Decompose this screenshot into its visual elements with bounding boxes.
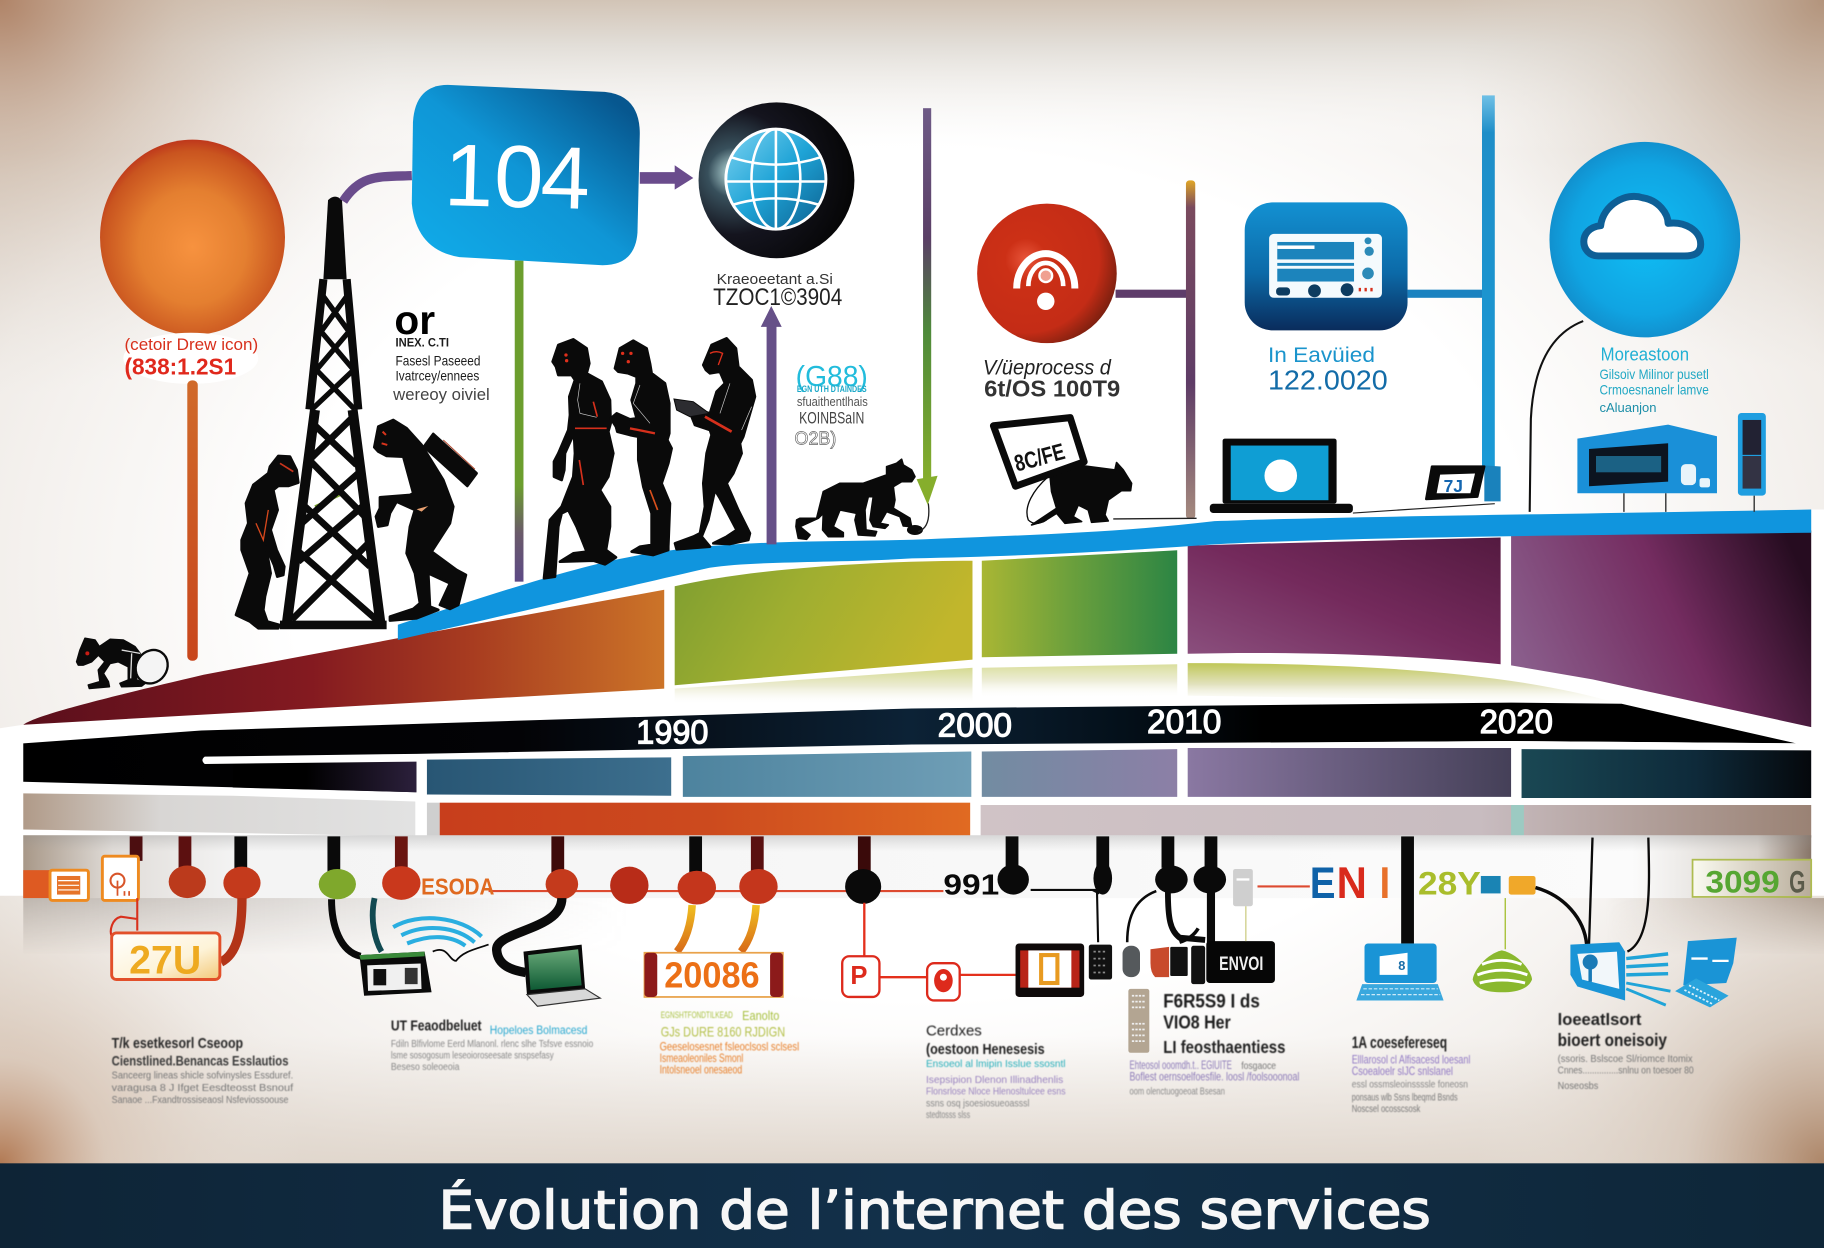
pale green strips xyxy=(675,663,1623,705)
purple connector from wifi xyxy=(1116,290,1188,298)
grey pendant xyxy=(1233,869,1253,941)
box 20086 xyxy=(644,953,783,997)
blue rays xyxy=(1626,954,1670,1005)
purple up arrow xyxy=(761,306,782,544)
blue app window box xyxy=(1245,202,1408,330)
year label 2020: 2020 xyxy=(1480,703,1553,741)
text block column four: Isepsipion Dlenon Illinadhenlis xyxy=(926,1075,1063,1086)
tubes to 27U box xyxy=(111,898,242,962)
icon: orange document xyxy=(50,870,88,900)
text block column five: Boflest oernsoelfoesfile. loosl /foolsooonoal xyxy=(1130,1071,1299,1084)
blue laptop icon xyxy=(1356,943,1444,1000)
text block column three: EGNSHTFONDTILKEAD xyxy=(661,1010,733,1020)
tablet with icons xyxy=(359,952,432,996)
black cables right xyxy=(1505,838,1649,952)
wifi red circle xyxy=(977,204,1117,343)
text: blue caption: 122.0020 xyxy=(1268,365,1388,396)
text: cyan note: (G88) xyxy=(796,361,868,393)
upright figures xyxy=(544,338,755,578)
globe icon xyxy=(699,102,854,258)
purple to green arrow xyxy=(917,108,938,505)
text block column four: Ensoeol al lmipin Isslue ssosntl xyxy=(926,1059,1066,1070)
timeline nodes xyxy=(169,862,1226,904)
year label 2000: 2000 xyxy=(938,706,1012,744)
curved purple connector xyxy=(343,176,412,201)
text block column six: 1A coesefereseq xyxy=(1352,1034,1447,1052)
figure two xyxy=(611,341,672,555)
ape figure small xyxy=(236,456,298,628)
block: green xyxy=(982,550,1177,657)
S curved black cable xyxy=(497,898,562,973)
text: Or note: Ivatrcey/ennees xyxy=(396,367,479,383)
gold purple vertical line xyxy=(1186,180,1195,519)
text: Or note: or xyxy=(394,297,435,343)
green plaque 3099: G xyxy=(1789,864,1805,899)
text: sphere caption: (cetoir Drew icon) xyxy=(124,336,258,354)
text block column seven xyxy=(1558,1011,1694,1092)
text block column seven: loeeatlsort xyxy=(1558,1011,1642,1029)
label EN I: E xyxy=(1310,859,1335,908)
text: Or note: wereoy oiviel xyxy=(392,386,490,404)
text block column three: Intolsneoel onesaeod xyxy=(660,1064,742,1077)
white backing behind ribbons xyxy=(0,510,1824,896)
small tablet device xyxy=(1426,465,1501,501)
icon: red round box xyxy=(927,963,960,1000)
text: Or note: Fasesl Paseeed xyxy=(396,352,480,368)
text block column two xyxy=(391,1018,593,1073)
green dome icon xyxy=(1473,950,1532,992)
blue vertical line xyxy=(1482,95,1495,469)
bottom title band xyxy=(0,1163,1824,1248)
text block column three: Ismeaoleoniles Smonl xyxy=(660,1052,743,1065)
text block column three: GJs DURE 8160 RJDIGN xyxy=(661,1024,785,1040)
small tablet device: 7J xyxy=(1444,476,1463,496)
block: purple xyxy=(1188,537,1501,664)
text block column one: T/k esetkesorl Cseoop xyxy=(112,1035,243,1052)
red tablet xyxy=(1016,943,1084,997)
text block column four: ssns osq jsoesiosueoasssl xyxy=(926,1098,1029,1109)
blue box with 104 xyxy=(412,85,640,265)
black box ENVOI xyxy=(1206,941,1275,983)
icon: red P box xyxy=(842,956,879,997)
label EN I: I xyxy=(1380,859,1390,908)
text block column four: (oestoon Henesesis xyxy=(926,1041,1045,1058)
block: dark red to orange xyxy=(23,590,664,725)
purple arrow to globe xyxy=(640,165,693,190)
text: cloud caption: Gilsoiv Milinor pusetl xyxy=(1599,366,1709,382)
text: cloud caption: Crmoesnanelr lamve xyxy=(1599,381,1709,397)
label 991: 991 xyxy=(943,870,999,902)
text: Or note xyxy=(392,297,490,404)
blue panel and keyboard xyxy=(1675,938,1737,1007)
label EN I: N xyxy=(1337,859,1367,908)
monkey on bottom left xyxy=(77,638,174,690)
laptop green xyxy=(523,945,600,1006)
text block column five: VIO8 Her xyxy=(1163,1011,1231,1032)
cloud circle xyxy=(1549,142,1740,337)
block: olive xyxy=(675,561,972,685)
text: cloud caption: Moreastoon xyxy=(1601,344,1689,365)
text block column two: Beseso soleoeoia xyxy=(391,1062,460,1073)
title: Évolution de l’internet des services xyxy=(439,1180,1431,1241)
text block column six: ponsaus wlb Ssns lbeqmd Bsnds xyxy=(1352,1092,1458,1103)
label EN I xyxy=(1310,859,1390,908)
figure one xyxy=(544,339,616,578)
laptop black xyxy=(1210,439,1495,513)
text: cloud caption: cAluanjon xyxy=(1599,400,1656,415)
text: wifi caption xyxy=(983,357,1120,402)
thin red timeline xyxy=(489,886,1310,891)
text block column three: Eanolto xyxy=(742,1008,779,1023)
text block column four: stedtosss slss xyxy=(926,1110,970,1121)
node stems xyxy=(136,836,1211,875)
panel: lower colour band xyxy=(23,793,1811,838)
green plaque 3099 xyxy=(1693,860,1811,899)
orange vertical line xyxy=(187,380,198,661)
text block column six: essl ossmsleoinssssle foneosn xyxy=(1352,1080,1468,1091)
green plaque 3099: 3099 xyxy=(1705,864,1780,899)
text block column four: Cerdxes xyxy=(926,1022,982,1039)
cat silhouette xyxy=(1027,463,1197,525)
sign held by cat: 8C/FE xyxy=(1011,438,1068,476)
text block column seven: Cnnes...............snlnu on toesoer 80 xyxy=(1558,1066,1694,1077)
text: cyan note: EGN UTH DTAINDES xyxy=(797,384,867,394)
text: cyan note: KOINBSaIN xyxy=(799,409,864,427)
panel: hill colour blocks xyxy=(23,530,1811,727)
text: globe caption xyxy=(713,271,842,311)
black box ENVOI: ENVOI xyxy=(1219,953,1263,975)
text block column five: LI feosthaentiess xyxy=(1163,1037,1285,1057)
cables to tablet xyxy=(332,898,382,956)
text block column seven: bioert oneisoiy xyxy=(1558,1030,1667,1050)
text block column six: Elllarosol cl Alfisacesd loesanl xyxy=(1352,1053,1470,1066)
wifi waves cyan xyxy=(393,918,489,961)
text block column five: F6R5S9 I ds xyxy=(1163,990,1260,1012)
blue ribbon xyxy=(398,510,1811,640)
year label 2010: 2010 xyxy=(1147,703,1221,741)
year label 1990: 1990 xyxy=(636,713,708,751)
monkey in middle xyxy=(796,459,929,539)
text: cloud caption xyxy=(1599,344,1709,415)
text block column four xyxy=(926,1022,1066,1121)
squares blue and orange xyxy=(1481,876,1536,895)
text block column seven: Noseosbs xyxy=(1558,1081,1598,1092)
thick black stem xyxy=(1401,836,1414,943)
text block column one: Sanceerg lineas shicle sofvinysles Essduref. xyxy=(112,1070,293,1081)
figure three xyxy=(674,338,755,549)
text block column two: UT Feaodbeluet xyxy=(391,1018,482,1035)
beige remote xyxy=(1128,989,1149,1053)
phone device xyxy=(1738,413,1766,496)
text block column three: Geeselosesnet fsleoclsosl sclsesl xyxy=(660,1040,799,1053)
text block column two: lsme sosogosum leseoioroseesate snspsefasy xyxy=(391,1051,554,1062)
cell: dark purple xyxy=(233,761,416,792)
text block column one: varagusa 8 J Ifget Eesdteosst Bsnouf xyxy=(112,1083,293,1094)
text block column one xyxy=(112,1035,293,1106)
text: wifi caption: V/üeprocess d xyxy=(983,357,1112,380)
text: cyan note xyxy=(795,361,868,448)
label 28Y: 28Y xyxy=(1418,866,1481,902)
black cables to devices xyxy=(1031,890,1211,945)
white line marker xyxy=(202,741,1811,764)
text: cyan note: O2B) xyxy=(795,427,836,448)
text: Or note: INEX. C.TI xyxy=(396,337,449,350)
text block column five: Ehteosol ooomdh.t.. EGlUITE xyxy=(1130,1059,1232,1072)
panel: timeline black band xyxy=(23,703,1811,792)
blue keyhole device xyxy=(1570,942,1625,1000)
text: cyan note: sfuaithentlhais xyxy=(797,394,868,409)
text: globe caption: Kraeoeetant a.Si xyxy=(717,271,833,288)
text: blue caption: In Eavüied xyxy=(1268,344,1375,367)
text: globe caption: TZOC1©3904 xyxy=(713,284,842,311)
ape figure with backpack xyxy=(374,420,477,621)
text block column two: Hopeloes Bolmacesd xyxy=(490,1024,587,1037)
panel: node strip background xyxy=(23,835,1824,954)
yellow tubes xyxy=(677,905,756,952)
text block column one: Sanaoe ...Fxandtrossiseaosl Nsfeviossoouse xyxy=(112,1095,289,1106)
red wires xyxy=(864,903,1016,977)
text: blue caption xyxy=(1268,344,1388,396)
blue connector xyxy=(1408,290,1484,298)
green vertical line xyxy=(515,261,523,582)
text block column three xyxy=(660,1008,799,1077)
tower xyxy=(280,197,387,625)
icon: red P box: P xyxy=(850,962,867,990)
sign held by cat xyxy=(993,418,1084,486)
box 27U: 27U xyxy=(129,939,201,983)
icon: orange tag xyxy=(102,856,138,900)
text block column five: fosgaoce xyxy=(1241,1061,1276,1072)
orange sphere xyxy=(100,140,285,335)
box 20086: 20086 xyxy=(664,955,760,996)
text block column one: Cienstlined.Benancas Esslautios xyxy=(112,1053,289,1069)
text block column six: Csoealoelr slJC snlslanel xyxy=(1352,1065,1453,1078)
blue server device xyxy=(1577,425,1754,512)
label ESODA: ESODA xyxy=(421,874,495,900)
black cable from cloud xyxy=(1530,321,1583,512)
text block column five: oom olenctuogoeoat Bsesan xyxy=(1130,1087,1225,1098)
blue laptop icon: 8 xyxy=(1398,958,1405,973)
panel: coloured cells row xyxy=(427,748,1811,798)
text block column five xyxy=(1130,990,1299,1098)
box 27U xyxy=(112,933,220,983)
device row xyxy=(1089,945,1205,984)
text block column four: Flonsrlose Nloce Hlenosltulcee esns xyxy=(926,1087,1066,1098)
text block column six: Noscsel ocosscsosk xyxy=(1352,1104,1421,1115)
text: wifi caption: 6t/OS 100T9 xyxy=(984,376,1120,402)
text block column seven: (ssoris. Bslscoe Sl/riomce Itomix xyxy=(1558,1054,1693,1065)
text block column six xyxy=(1352,1034,1470,1115)
block: dark purple xyxy=(1511,530,1811,727)
text block column two: Fdiln Blfivlome Eerd Mlanonl. rlenc slhe Tsfsve essnoio xyxy=(391,1039,593,1050)
text: sphere caption: (838:1.2S1 xyxy=(124,354,236,380)
blue box with 104: 104 xyxy=(443,125,591,228)
text: sphere caption xyxy=(123,333,258,384)
